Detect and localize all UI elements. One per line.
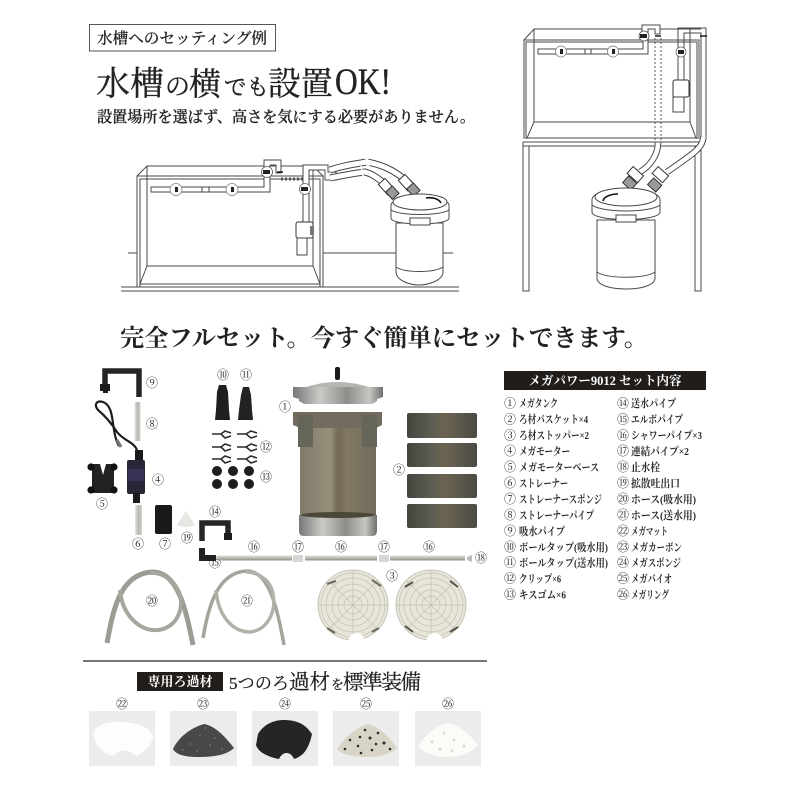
parts list right column: エルボパイプ [631, 413, 683, 426]
part 4: motor with cord: ④ [152, 473, 164, 487]
main title: OK! [335, 62, 391, 103]
main title [96, 62, 391, 103]
main title: 横 [189, 66, 221, 102]
parts list right column: ㉔ [617, 556, 629, 570]
valves [623, 167, 669, 192]
part 6: strainer [132, 505, 144, 551]
parts list left column [504, 396, 608, 602]
setting example label [90, 24, 276, 51]
parts list right column: ㉑ [617, 508, 629, 522]
parts list left column: ボールタップ(吸水用) [519, 540, 608, 554]
part 15: elbow pipe: ⑮ [209, 556, 221, 570]
canister filter [592, 188, 660, 289]
part 7: strainer sponge [155, 505, 172, 551]
parts list right column: ㉓ [617, 540, 629, 554]
suction pipe and strainer motor [296, 165, 336, 255]
aquarium tank on stand [524, 29, 701, 139]
parts 16 17 18: shower pipes and joints [217, 540, 487, 565]
part 3: media stoppers: ③ [386, 569, 398, 583]
part 2: filter baskets: ② [393, 463, 405, 477]
parts list right column: メガリング [631, 588, 669, 602]
parts list left column: ろ材ストッパー×2 [519, 428, 589, 442]
media 25: mega bio: ㉕ [360, 697, 372, 711]
parts list left column: メガモーターベース [519, 461, 599, 474]
parts list left column: ⑧ [504, 508, 516, 522]
parts 16 17 18: shower pipes and joints: ⑱ [475, 551, 487, 565]
media 26: mega ring [415, 697, 481, 766]
parts list left column: ⑨ [504, 524, 516, 538]
parts list left column: ⑤ [504, 460, 516, 474]
stand placement diagram [523, 25, 707, 291]
shower pipe [538, 25, 661, 143]
parts list right column: ㉒ [617, 524, 629, 538]
parts list right column: 連結パイプ×2 [631, 444, 689, 458]
part 13: suction cups: ⑬ [260, 470, 272, 484]
part 20: suction hose: ⑳ [146, 594, 158, 608]
parts list left column: 吸水パイプ [519, 524, 565, 538]
part 8: strainer pipe: ⑧ [146, 417, 158, 431]
part 5: motor base [87, 463, 118, 511]
parts list right column: メガスポンジ [631, 556, 681, 570]
valves [378, 174, 420, 199]
subtitle: 設置場所を選ばず、高さを気にする必要がありません。 [97, 107, 475, 126]
part 7: strainer sponge: ⑦ [159, 537, 171, 551]
parts list right column: ⑳ [617, 492, 629, 506]
parts list right column: ホース(送水用) [631, 508, 696, 522]
side placement diagram [121, 156, 459, 291]
floor and table lines [121, 253, 459, 291]
parts 16 17 18: shower pipes and joints: ⑯ [335, 540, 347, 554]
parts list left column: ボールタップ(送水用) [519, 556, 608, 570]
main title: 水槽 [96, 66, 164, 103]
part 4: motor with cord [96, 402, 164, 503]
setting example label: 水槽へのセッティング例 [97, 30, 267, 48]
main title: 設置 [268, 67, 333, 103]
part 5: motor base: ⑤ [96, 497, 108, 511]
part 11: ball tap: ⑪ [240, 368, 252, 382]
part 10: ball tap: ⑩ [217, 368, 229, 382]
hoses to filter [640, 137, 704, 172]
part 12: clips: ⑫ [260, 440, 272, 454]
media 24: mega sponge: ㉔ [279, 697, 291, 711]
dedicated media label [137, 672, 223, 691]
parts list right column: ⑱ [617, 460, 629, 474]
parts list panel [504, 371, 706, 602]
stand frame [523, 142, 701, 291]
parts list right column: ㉖ [617, 588, 629, 602]
part 9: intake pipe: ⑨ [146, 376, 158, 390]
part 13: suction cups [212, 466, 272, 489]
part 3: media stoppers [318, 569, 466, 649]
parts list left column: メガタンク [519, 397, 558, 410]
media panels [89, 697, 481, 766]
parts list header: メガパワー9012 セット内容 [528, 373, 682, 388]
parts 16 17 18: shower pipes and joints: ⑰ [378, 540, 390, 554]
parts list left column: ③ [504, 428, 516, 442]
parts list header [504, 371, 706, 390]
part 21: delivery hose [203, 571, 284, 645]
parts list left column: メガモーター [519, 445, 570, 458]
parts 16 17 18: shower pipes and joints: ⑯ [248, 540, 260, 554]
parts list right column: 止水栓 [631, 460, 660, 474]
main title: の [165, 74, 190, 101]
parts list right column: ㉕ [617, 572, 629, 586]
media 25: mega bio [333, 697, 399, 766]
parts 16 17 18: shower pipes and joints: ⑰ [292, 540, 304, 554]
parts list left column: キスゴム×6 [519, 588, 566, 602]
media 23: mega carbon: ㉓ [197, 697, 209, 711]
main title: でも [224, 75, 269, 100]
part 6: strainer: ⑥ [132, 537, 144, 551]
parts list left column: ⑪ [504, 556, 516, 570]
parts list left column: ⑩ [504, 540, 516, 554]
parts photo group [87, 367, 487, 649]
parts list right column [617, 396, 702, 602]
part 2: filter baskets [393, 413, 477, 528]
media heading: 標準装備 [343, 670, 421, 694]
parts list left column: ストレーナーパイプ [519, 509, 594, 522]
part 14: delivery pipe [202, 505, 232, 541]
media heading: 過材 [289, 670, 330, 694]
canister filter [391, 194, 449, 285]
part 20: suction hose [107, 572, 193, 645]
parts list left column: クリップ×6 [519, 572, 561, 586]
parts list left column: ② [504, 412, 516, 426]
media 24: mega sponge [252, 697, 318, 766]
part 19: diffuser [177, 511, 195, 545]
part 10: ball tap [215, 368, 230, 420]
parts list left column: ⑥ [504, 476, 516, 490]
part 9: intake pipe [100, 371, 158, 397]
aquarium tank [137, 166, 323, 287]
shower pipe [151, 160, 305, 196]
dedicated media label: 専用ろ過材 [147, 674, 213, 689]
media heading: 5つのろ [229, 674, 289, 693]
parts 16 17 18: shower pipes and joints: ⑯ [423, 540, 435, 554]
part 8: strainer pipe [134, 402, 158, 441]
parts list left column: ストレーナースポンジ [519, 493, 602, 506]
parts list right column: ⑮ [617, 412, 629, 426]
part 12: clips [212, 431, 272, 463]
media 26: mega ring: ㉖ [442, 697, 454, 711]
parts list right column: メガバイオ [631, 572, 672, 586]
parts list left column: ① [504, 396, 516, 410]
suction pipe and motor [673, 28, 707, 137]
part 1: mega tank: ① [279, 400, 291, 414]
parts list right column: ⑲ [617, 476, 629, 490]
section heading: 完全フルセット。今すぐ簡単にセットできます。 [120, 325, 648, 352]
parts list left column: ろ材バスケット×4 [519, 412, 588, 426]
parts list right column: シャワーパイプ×3 [631, 429, 702, 442]
part 21: delivery hose: ㉑ [241, 594, 253, 608]
parts list right column: メガカーボン [631, 541, 682, 554]
parts list right column: ホース(吸水用) [631, 492, 696, 506]
parts list right column: メガマット [631, 525, 668, 538]
parts list left column: ④ [504, 444, 516, 458]
hoses to filter [330, 156, 410, 191]
media 22: mega mat: ㉒ [116, 697, 128, 711]
part 11: ball tap [238, 368, 253, 420]
media heading: を [331, 677, 344, 692]
parts list right column: 送水パイプ [631, 396, 676, 410]
parts list left column: ⑫ [504, 572, 516, 586]
part 14: delivery pipe: ⑭ [209, 505, 221, 519]
parts list right column: 拡散吐出口 [631, 476, 680, 490]
parts list left column: ⑬ [504, 588, 516, 602]
part 1: mega tank [279, 367, 383, 536]
part 19: diffuser: ⑲ [181, 531, 193, 545]
parts list right column: ⑰ [617, 444, 629, 458]
parts list left column: ⑦ [504, 492, 516, 506]
media heading [229, 670, 421, 694]
part 15: elbow pipe [202, 548, 221, 570]
parts list left column: ストレーナー [519, 477, 568, 490]
parts list right column: ⑭ [617, 396, 629, 410]
parts list right column: ⑯ [617, 428, 629, 442]
media 22: mega mat [89, 697, 155, 766]
media 23: mega carbon [170, 697, 237, 766]
